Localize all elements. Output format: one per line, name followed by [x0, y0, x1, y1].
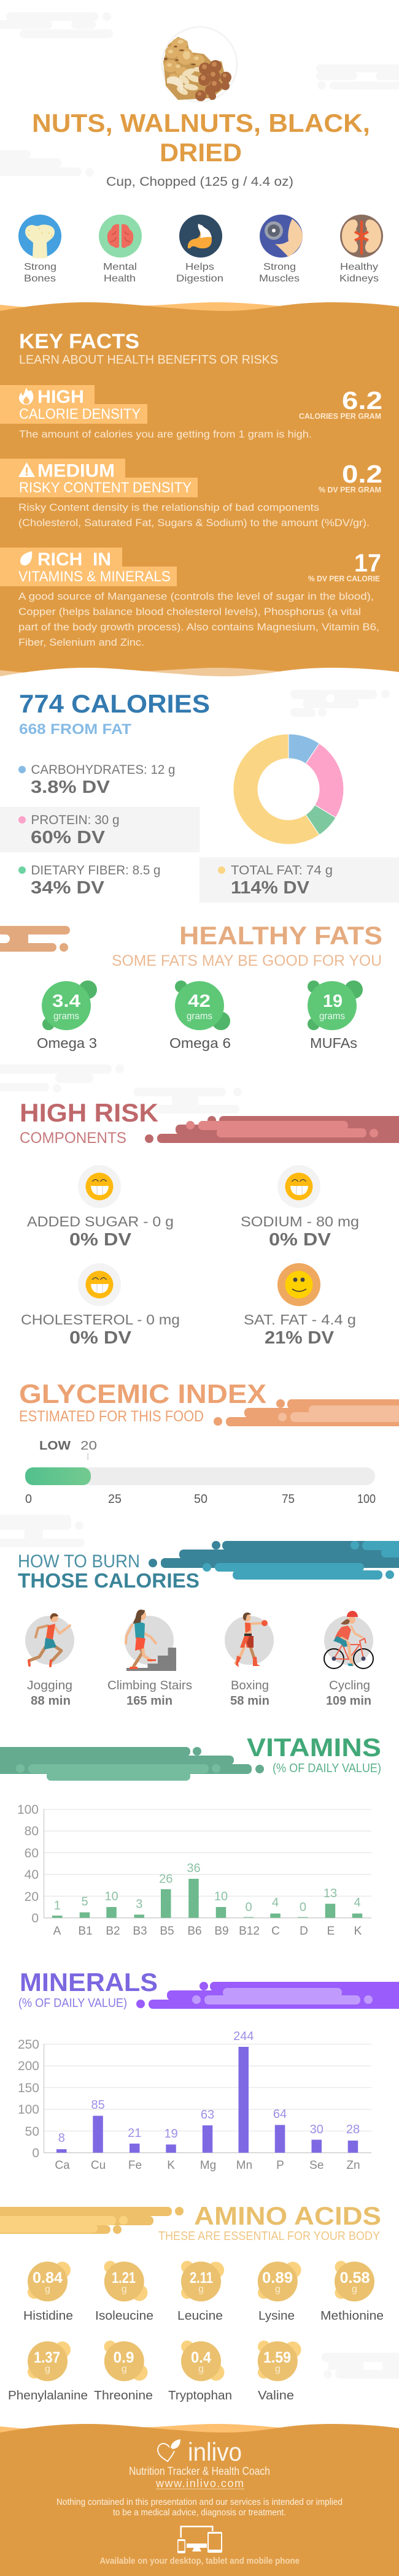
- gauge label: 20: [80, 1439, 97, 1453]
- amino: methionine: Methionine: [320, 2309, 384, 2323]
- bar chart: vitamins: B2: [106, 1925, 120, 1938]
- fact: high calorie density: CALORIE DENSITY: [19, 406, 141, 422]
- bar chart: minerals: 85: [91, 2098, 105, 2112]
- risk: saturated fat: [244, 1263, 356, 1348]
- bar chart: vitamins: B5: [160, 1925, 174, 1938]
- amino: histidine: 0.84: [33, 2269, 63, 2287]
- fact: rich in vitamins and minerals: [0, 548, 381, 648]
- icon: digestion: [179, 215, 222, 258]
- heading: VITAMINS: [247, 1733, 381, 1762]
- bar chart: minerals: 0: [32, 2146, 39, 2160]
- amino: threonine: g: [122, 2364, 127, 2374]
- icon: strong bones: [18, 215, 61, 258]
- title: DRIED: [160, 138, 242, 167]
- fact: high calorie density: The amount of calories you are getting from 1 gram is high.: [19, 428, 312, 440]
- subheading: (% OF DAILY VALUE): [273, 1762, 381, 1775]
- bar chart: minerals: 64: [273, 2108, 287, 2121]
- amino: tryptophan: g: [198, 2364, 204, 2374]
- bar chart: vitamins: 4: [354, 1896, 361, 1909]
- bar chart: vitamins: 60: [25, 1846, 39, 1860]
- subheading: THESE ARE ESSENTIAL FOR YOUR BODY: [158, 2230, 380, 2243]
- gauge scale: 0: [25, 1492, 32, 1506]
- heading: HIGH RISK: [20, 1098, 158, 1127]
- heading line 2: THOSE CALORIES: [18, 1569, 200, 1592]
- bar chart: minerals: Ca: [55, 2159, 70, 2172]
- label: Jogging: [27, 1679, 72, 1692]
- label: Boxing: [231, 1679, 269, 1692]
- bar chart: vitamins: E: [327, 1925, 335, 1938]
- bar chart: vitamins: 10: [214, 1890, 228, 1903]
- bar chart: minerals: P: [276, 2159, 284, 2172]
- amino: methionine: g: [352, 2284, 357, 2295]
- bar chart: vitamins: 0: [300, 1901, 306, 1914]
- label: [107, 1679, 192, 1708]
- activity: climbing stairs: [107, 1610, 192, 1708]
- amino: leucine: Leucine: [177, 2309, 223, 2323]
- risk: cholesterol: CHOLESTEROL - 0 mg: [21, 1312, 180, 1328]
- fat: omega 3: grams: [53, 1011, 79, 1022]
- bar chart: minerals: Zn: [346, 2159, 360, 2172]
- bar chart: minerals: 30: [310, 2123, 323, 2136]
- benefit icons row: [18, 215, 383, 284]
- amino: threonine: 0.9: [113, 2349, 134, 2366]
- bar chart: minerals: Mg: [200, 2159, 216, 2172]
- panel: glycemic index: [19, 1379, 399, 1506]
- amino: phenylalanine: 1.37: [34, 2349, 60, 2366]
- disclaimer: to be a medical advice, diagnosis or treatment.: [113, 2507, 286, 2518]
- heading line 1: HOW TO BURN: [18, 1551, 140, 1572]
- bar chart: vitamins: 20: [25, 1890, 39, 1904]
- fact: medium risky content density: [0, 459, 382, 529]
- gauge scale: 100: [357, 1492, 376, 1506]
- macro: dietary fiber: 34% DV: [31, 878, 105, 898]
- bar chart: vitamins: C: [271, 1925, 280, 1938]
- icon: warning triangle: [18, 462, 35, 477]
- bar chart: vitamins: 26: [159, 1873, 172, 1886]
- macro: total fat: [218, 863, 333, 898]
- benefit labels: Strong: [24, 262, 56, 272]
- serving size: Cup, Chopped (125 g / 4.4 oz): [106, 175, 293, 189]
- heading: HEALTHY FATS: [179, 921, 382, 950]
- bar chart: vitamins: 5: [81, 1895, 88, 1909]
- bar chart: vitamins: [17, 1803, 371, 1938]
- benefit labels: Mental: [103, 262, 137, 272]
- amino: lysine: g: [275, 2284, 281, 2295]
- amino: leucine: [177, 2261, 224, 2323]
- bar chart: vitamins: A: [53, 1925, 61, 1938]
- bar chart: vitamins: B6: [187, 1925, 202, 1938]
- icon: brain: [99, 215, 142, 258]
- label: [326, 1679, 371, 1708]
- website link: www.inlivo.com: [155, 2477, 244, 2490]
- icon: flame: [19, 388, 33, 405]
- amino: threonine: Threonine: [94, 2389, 153, 2402]
- fat: MUFAs: [308, 980, 363, 1051]
- gauge scale: 50: [194, 1492, 207, 1506]
- benefit labels: Digestion: [176, 273, 223, 284]
- bar chart: minerals: Cu: [91, 2159, 106, 2172]
- panel: high risk components: [20, 1098, 399, 1348]
- gauge bar: [25, 1467, 375, 1485]
- bar chart: vitamins: B1: [78, 1925, 93, 1938]
- amino: lysine: 0.89: [262, 2269, 293, 2287]
- icon: kidneys: [340, 215, 383, 258]
- activity: boxing: [225, 1613, 274, 1708]
- logo: [158, 2437, 242, 2466]
- bar chart: vitamins: 0: [245, 1901, 252, 1914]
- fact: medium risky content density: MEDIUM: [37, 461, 115, 481]
- benefit labels: Helps: [185, 262, 214, 272]
- decoration: mineral bars: [136, 1982, 399, 2009]
- subheading: ESTIMATED FOR THIS FOOD: [19, 1408, 204, 1425]
- risk: saturated fat: SAT. FAT - 4.4 g: [244, 1312, 356, 1328]
- risk: added sugar: 0% DV: [69, 1230, 132, 1250]
- heading: calories: 774 CALORIES: [19, 689, 210, 718]
- fact: rich in vitamins and minerals: part of the body growth process). Also contains Magnesium, Vitamin B6,: [18, 621, 379, 633]
- row highlight backgrounds: [0, 807, 399, 903]
- fat: omega 6: [169, 980, 231, 1051]
- gauge scale: [25, 1492, 376, 1506]
- fat: omega 6: grams: [187, 1011, 212, 1022]
- label: [230, 1679, 269, 1708]
- label: 165 min: [126, 1694, 172, 1708]
- amino: tryptophan: 0.4: [191, 2349, 211, 2366]
- gauge label: [39, 1439, 97, 1453]
- label: 58 min: [230, 1694, 269, 1708]
- bar chart: vitamins: K: [354, 1925, 362, 1938]
- fat: MUFAs: 19: [323, 992, 343, 1011]
- label: 109 min: [326, 1694, 371, 1708]
- bar chart: minerals: 250: [18, 2038, 39, 2052]
- bar chart: minerals: Se: [309, 2159, 323, 2172]
- amino: valine: g: [275, 2364, 281, 2374]
- subheading: (% OF DAILY VALUE): [18, 1997, 127, 2010]
- fact: medium risky content density: % DV PER GRAM: [319, 485, 381, 494]
- amino: valine: 1.59: [263, 2349, 291, 2366]
- fat: omega 6: 42: [188, 992, 211, 1011]
- amino: histidine: g: [45, 2284, 50, 2295]
- macro: protein: 60% DV: [31, 828, 106, 847]
- fat: omega 6: Omega 6: [169, 1035, 231, 1051]
- benefit labels: Health: [104, 273, 136, 284]
- logo: inlivo: [188, 2437, 242, 2466]
- panel: how to burn calories: [18, 1541, 399, 1708]
- amino: methionine: [320, 2261, 384, 2323]
- macro: total fat: TOTAL FAT: 74 g: [231, 863, 333, 877]
- benefit labels: Bones: [24, 273, 56, 284]
- label: Cycling: [329, 1679, 370, 1692]
- risk: added sugar: ADDED SUGAR - 0 g: [27, 1213, 174, 1229]
- fact: high calorie density: 6.2: [342, 386, 382, 415]
- benefit labels: Healthy: [340, 262, 378, 272]
- fact: rich in vitamins and minerals: Fiber, Selenium and Zinc.: [18, 636, 144, 648]
- title: [32, 109, 370, 167]
- benefit labels: [24, 262, 379, 284]
- bar chart: minerals: 100: [18, 2103, 39, 2117]
- amino: phenylalanine: [8, 2341, 88, 2402]
- amino: histidine: Histidine: [23, 2309, 73, 2323]
- amino: isoleucine: [95, 2261, 153, 2323]
- macro: carbohydrates: CARBOHYDRATES: 12 g: [31, 763, 176, 777]
- tagline: Nutrition Tracker & Health Coach: [129, 2465, 270, 2477]
- fact: rich in vitamins and minerals: A good source of Manganese (controls the level of sugar in the blood),: [18, 590, 374, 602]
- amino: histidine: [23, 2261, 73, 2323]
- fact: rich in vitamins and minerals: RICH IN: [37, 549, 111, 570]
- decoration: burn bars: [149, 1541, 399, 1580]
- fact: medium risky content density: 0.2: [342, 460, 382, 488]
- panel: amino acids: [0, 2201, 384, 2402]
- label: Climbing Stairs: [107, 1679, 192, 1692]
- bar chart: minerals: 50: [25, 2125, 39, 2139]
- bar chart: vitamins: 10: [104, 1890, 118, 1903]
- amino: methionine: 0.58: [340, 2269, 370, 2287]
- panel: healthy fats: [0, 921, 382, 1051]
- fact: high calorie density: CALORIES PER GRAM: [299, 411, 381, 421]
- bar chart: vitamins: B12: [239, 1925, 260, 1938]
- bar chart: minerals: 28: [346, 2123, 360, 2136]
- subheading: from fat: 668 FROM FAT: [19, 721, 131, 738]
- fat: omega 3: 3.4: [52, 992, 80, 1011]
- subheading: COMPONENTS: [20, 1129, 126, 1147]
- bar chart: vitamins: 36: [187, 1862, 201, 1875]
- risk: saturated fat: 21% DV: [265, 1328, 335, 1348]
- fact: medium risky content density: (Cholesterol, Saturated Fat, Sugars & Sodium) to the amount (%DV/gr).: [18, 517, 370, 529]
- hero image: bowl of mixed nuts: [162, 27, 237, 102]
- macro: carbohydrates: [18, 763, 176, 797]
- title: NUTS, WALNUTS, BLACK,: [32, 109, 370, 137]
- disclaimer: [56, 2497, 343, 2518]
- subheading: LEARN ABOUT HEALTH BENEFITS OR RISKS: [19, 353, 278, 367]
- availability note: Available on your desktop, tablet and mobile phone: [99, 2556, 300, 2566]
- amino: isoleucine: Isoleucine: [95, 2309, 153, 2323]
- gauge label: LOW: [39, 1439, 71, 1453]
- heading: AMINO ACIDS: [194, 2201, 381, 2230]
- gauge scale: 25: [108, 1492, 122, 1506]
- amino: lysine: Lysine: [258, 2309, 295, 2323]
- fat: MUFAs: MUFAs: [310, 1035, 357, 1051]
- bar chart: minerals: 150: [18, 2081, 39, 2095]
- donut chart: [233, 734, 344, 844]
- fat: omega 3: Omega 3: [37, 1035, 97, 1051]
- amino: tryptophan: [168, 2341, 232, 2402]
- icon: heart and leaf: [158, 2440, 180, 2461]
- bar chart: minerals: 21: [128, 2127, 141, 2140]
- fact: medium risky content density: Risky Content density is the relationship of bad components: [18, 502, 319, 513]
- decoration: amino bars: [0, 2207, 184, 2234]
- fact: rich in vitamins and minerals: VITAMINS & MINERALS: [18, 568, 171, 585]
- amino: leucine: g: [198, 2284, 204, 2295]
- risk: sodium: [241, 1165, 359, 1250]
- risk: sodium: SODIUM - 80 mg: [241, 1213, 359, 1229]
- panel: key facts: [0, 302, 399, 684]
- footer: [0, 2424, 399, 2576]
- benefit labels: Kidneys: [339, 273, 379, 284]
- amino: phenylalanine: Phenylalanine: [8, 2389, 88, 2402]
- amino: tryptophan: Tryptophan: [168, 2389, 232, 2402]
- panel: minerals: [18, 1968, 399, 2172]
- bar chart: vitamins: 0: [31, 1911, 39, 1925]
- decoration: high risk bars: [145, 1116, 399, 1143]
- bar chart: vitamins: 13: [323, 1887, 337, 1900]
- fact: rich in vitamins and minerals: % DV PER CALORIE: [308, 574, 380, 583]
- macro: dietary fiber: DIETARY FIBER: 8.5 g: [31, 863, 161, 877]
- heading: MINERALS: [20, 1968, 158, 1997]
- bar chart: minerals: 244: [233, 2030, 254, 2043]
- risk: sodium: 0% DV: [269, 1230, 331, 1250]
- bar chart: minerals: [18, 2030, 371, 2172]
- bar chart: vitamins: D: [300, 1925, 308, 1938]
- icon: muscles: [260, 215, 303, 258]
- activity: jogging: [25, 1613, 74, 1708]
- bar chart: minerals: K: [167, 2159, 175, 2172]
- bar chart: vitamins: 4: [272, 1896, 279, 1909]
- amino: leucine: 2.11: [190, 2269, 213, 2287]
- risk: added sugar: [27, 1165, 174, 1250]
- fact: rich in vitamins and minerals: 17: [354, 549, 381, 577]
- bar chart: vitamins: 40: [25, 1868, 39, 1882]
- amino: valine: [258, 2341, 301, 2402]
- bar chart: minerals: 200: [18, 2059, 39, 2073]
- bar chart: vitamins: B3: [133, 1925, 147, 1938]
- heading: GLYCEMIC INDEX: [19, 1379, 266, 1409]
- bar chart: vitamins: 100: [17, 1803, 39, 1817]
- activity: cycling: [324, 1611, 373, 1708]
- macro: protein: PROTEIN: 30 g: [31, 813, 119, 827]
- bar chart: vitamins: 3: [136, 1898, 142, 1911]
- risk: cholesterol: 0% DV: [69, 1328, 132, 1348]
- bar chart: minerals: Mn: [236, 2159, 252, 2172]
- decoration: glycemic bars: [214, 1399, 399, 1426]
- fact: rich in vitamins and minerals: Copper (helps balance blood cholesterol levels), Phosphorus (a vital: [18, 606, 361, 617]
- bar chart: minerals: Fe: [128, 2159, 142, 2172]
- label: [27, 1679, 72, 1708]
- bar chart: vitamins: 1: [54, 1899, 61, 1913]
- fat: MUFAs: grams: [319, 1011, 345, 1022]
- macro: dietary fiber: [18, 863, 161, 898]
- macro: protein: [18, 813, 119, 847]
- label: 88 min: [31, 1694, 71, 1708]
- gauge scale: 75: [282, 1492, 295, 1506]
- fact: high calorie density: HIGH: [37, 387, 84, 407]
- amino: threonine: [94, 2341, 153, 2402]
- bar chart: vitamins: 80: [25, 1824, 39, 1838]
- bar chart: minerals: 19: [164, 2127, 178, 2141]
- fact: medium risky content density: RISKY CONTENT DENSITY: [19, 480, 192, 496]
- bar chart: vitamins: B9: [214, 1925, 229, 1938]
- amino: isoleucine: 1.21: [112, 2269, 136, 2287]
- subheading: SOME FATS MAY BE GOOD FOR YOU: [112, 952, 382, 969]
- bar chart: minerals: 8: [58, 2131, 65, 2145]
- macro: carbohydrates: 3.8% DV: [31, 778, 110, 797]
- amino: phenylalanine: g: [45, 2364, 50, 2374]
- icon: leaf: [20, 551, 32, 565]
- fat: omega 3: [37, 980, 97, 1051]
- fact: high calorie density: [0, 385, 382, 440]
- amino: valine: Valine: [258, 2389, 294, 2402]
- decoration: healthy fats bars: [0, 926, 70, 952]
- benefit labels: Muscles: [259, 273, 300, 284]
- amino: lysine: [258, 2261, 301, 2323]
- risk: cholesterol: [21, 1263, 180, 1348]
- heading: key facts: KEY FACTS: [19, 330, 139, 353]
- panel: calories: [0, 689, 399, 903]
- bar chart: minerals: 63: [201, 2108, 214, 2122]
- benefit labels: Strong: [263, 262, 296, 272]
- amino: isoleucine: g: [122, 2284, 127, 2295]
- panel: vitamins: [0, 1733, 381, 1938]
- icon: devices: [177, 2526, 222, 2553]
- disclaimer: Nothing contained in this presentation and our services is intended or implied: [56, 2497, 343, 2507]
- decoration: vitamin bars: [0, 1747, 264, 1781]
- macro: total fat: 114% DV: [231, 878, 310, 898]
